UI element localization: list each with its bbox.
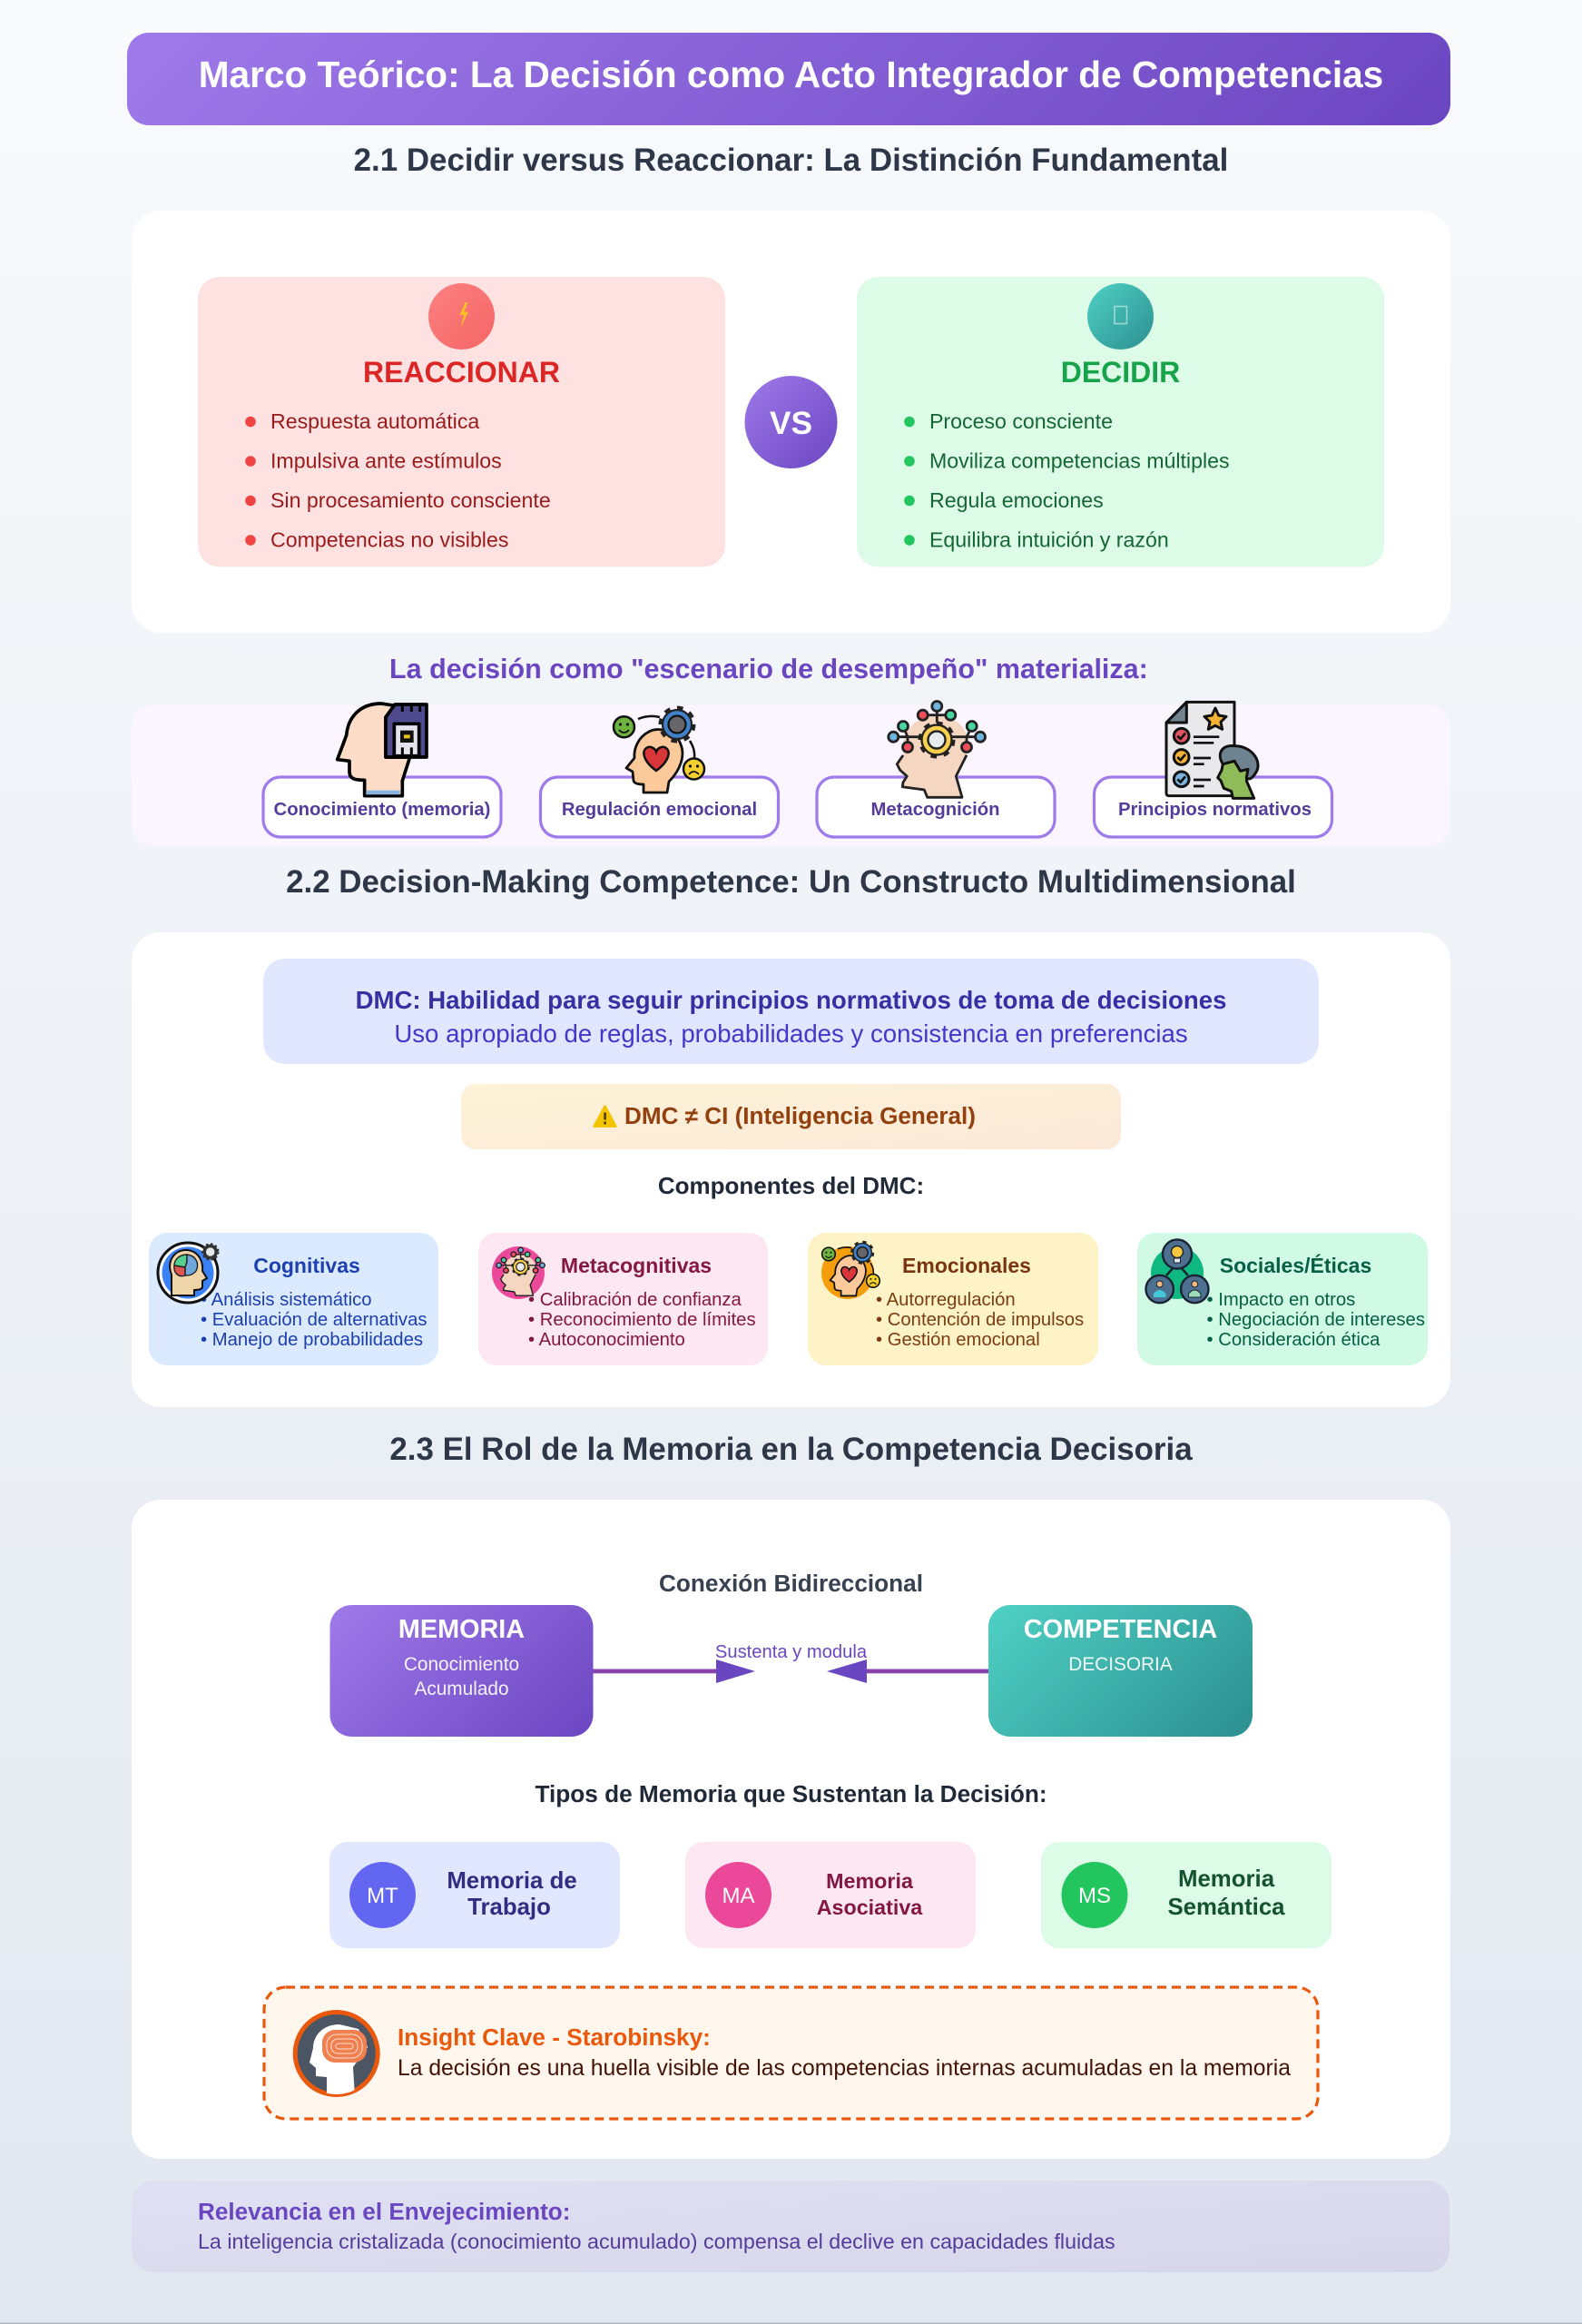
heading: tipos de memoria: Tipos de Memoria que Sustentan la Decisión: — [535, 1780, 1047, 1807]
icon: social network — [1145, 1240, 1209, 1303]
card: memoria de trabajo: Trabajo — [467, 1895, 551, 1920]
list: reaccionar traits: Competencias no visibles — [270, 528, 508, 552]
title banner — [127, 33, 1450, 125]
panel: decidir — [857, 277, 1384, 566]
callout: DMC not CI: DMC ≠ CI (Inteligencia General) — [624, 1102, 976, 1129]
box: memoria: Acumulado — [414, 1679, 509, 1699]
list: reaccionar traits — [245, 409, 551, 552]
box: competencia — [988, 1605, 1253, 1737]
card: sociales y éticas: Sociales/Éticas — [1220, 1253, 1371, 1277]
card: cognitivas — [149, 1233, 438, 1365]
icon: emotional regulation head — [614, 708, 704, 793]
panel: relevancia en el envejecimiento: Relevancia en el Envejecimiento: — [198, 2198, 570, 2225]
card: emocionales — [808, 1233, 1098, 1365]
card: cognitivas: • Análisis sistemático — [201, 1290, 372, 1310]
card: memoria asociativa: Memoria — [826, 1869, 914, 1893]
card: memoria semántica — [1041, 1842, 1331, 1948]
heading: section 2.1: 2.1 Decidir versus Reaccionar: La Distinción Fundamental — [354, 143, 1228, 178]
box: memoria — [330, 1605, 594, 1737]
box: competencia: COMPETENCIA — [1024, 1615, 1217, 1644]
card: sociales y éticas — [1137, 1233, 1428, 1365]
list: decidir traits: Regula emociones — [929, 488, 1104, 512]
badge: VS — [744, 376, 837, 468]
icon: emotional head — [821, 1242, 879, 1299]
heading: componentes: Componentes del DMC: — [658, 1172, 924, 1199]
card: metacognición: Metacognición — [871, 800, 999, 820]
card: cognitivas: • Evaluación de alternativas — [201, 1310, 427, 1330]
card: sociales y éticas: • Consideración ética — [1207, 1330, 1381, 1350]
box: memoria: MEMORIA — [398, 1615, 525, 1644]
list: reaccionar traits: Impulsiva ante estímulos — [270, 448, 502, 472]
panel: decidir versus reaccionar — [132, 211, 1450, 633]
card: conocimiento: Conocimiento (memoria) — [274, 800, 490, 820]
panel: DMC — [132, 932, 1450, 1407]
card: sociales y éticas: • Negociación de intereses — [1207, 1310, 1425, 1330]
panel: relevancia en el envejecimiento: La inteligencia cristalizada (conocimiento acumulado) compensa el declive en capacidades fluidas — [198, 2230, 1115, 2253]
list: decidir traits: Proceso consciente — [929, 409, 1113, 433]
card: principios — [1095, 777, 1332, 837]
card: cognitivas: Cognitivas — [253, 1254, 360, 1277]
card: principios: Principios normativos — [1118, 800, 1312, 820]
heading: decidir: DECIDIR — [1061, 356, 1180, 389]
card: memoria asociativa — [685, 1842, 976, 1948]
card: sociales y éticas: • Impacto en otros — [1207, 1290, 1355, 1310]
card: metacognitivas — [478, 1233, 768, 1365]
card: regulación: Regulación emocional — [562, 800, 757, 820]
card: memoria semántica: MS — [1078, 1884, 1111, 1908]
badge: VS: VS — [770, 406, 812, 441]
list: decidir traits — [904, 409, 1230, 552]
icon: metacognition head — [889, 701, 986, 797]
card: memoria de trabajo: Memoria de — [447, 1868, 577, 1894]
card: metacognitivas: • Calibración de confianza — [528, 1290, 742, 1310]
list: reaccionar traits: Respuesta automática — [270, 409, 479, 433]
card: regulación — [541, 777, 779, 837]
panel: memoria — [132, 1500, 1450, 2159]
callout: DMC definition: DMC: Habilidad para seguir principios normativos de toma de decisiones — [356, 986, 1226, 1014]
callout: insight clave — [264, 1987, 1318, 2119]
card: memoria asociativa: MA — [722, 1884, 755, 1908]
heading: escenario de desempeño: La decisión como "escenario de desempeño" materializa: — [389, 654, 1148, 684]
arrow: competencia to memoria — [827, 1659, 988, 1683]
card: memoria semántica: Memoria — [1178, 1866, 1275, 1892]
card: emocionales: Emocionales — [902, 1254, 1031, 1277]
card: metacognición — [817, 777, 1055, 837]
icon: cognitive head — [158, 1243, 218, 1303]
list: reaccionar traits: Sin procesamiento consciente — [270, 488, 551, 512]
callout: DMC definition: Uso apropiado de reglas, probabilidades y consistencia en preferencias — [394, 1019, 1188, 1048]
card: metacognitivas: • Reconocimiento de límites — [528, 1310, 756, 1330]
card: emocionales: • Gestión emocional — [876, 1330, 1040, 1350]
title banner: Marco Teórico: La Decisión como Acto Integrador de Competencias — [199, 54, 1383, 95]
heading: reaccionar: REACCIONAR — [363, 356, 560, 389]
card: emocionales: • Autorregulación — [876, 1290, 1016, 1310]
callout: insight clave: La decisión es una huella visible de las competencias internas acumuladas en la memoria — [398, 2056, 1291, 2081]
panel: escenario band — [132, 701, 1450, 846]
card: memoria de trabajo: MT — [367, 1884, 398, 1908]
card: metacognitivas: • Autoconocimiento — [528, 1330, 685, 1350]
icon: normative checklist — [1166, 702, 1258, 798]
card: memoria semántica: Semántica — [1167, 1895, 1285, 1920]
card: memoria asociativa: Asociativa — [817, 1896, 923, 1919]
icon: missing glyph in teal circle — [1087, 283, 1154, 350]
panel: relevancia en el envejecimiento — [132, 2181, 1449, 2272]
callout: insight clave: Insight Clave - Starobinsky: — [398, 2024, 711, 2051]
callout: DMC not CI — [461, 1084, 1121, 1149]
heading: section 2.2: 2.2 Decision-Making Competence: Un Constructo Multidimensional — [286, 864, 1296, 900]
icon: warning — [594, 1107, 615, 1126]
panel: reaccionar — [198, 277, 725, 566]
arrow: memoria to competencia — [593, 1659, 755, 1683]
list: decidir traits: Moviliza competencias múltiples — [929, 448, 1230, 472]
heading: conexión bidireccional: Conexión Bidireccional — [659, 1570, 923, 1597]
list: decidir traits: Equilibra intuición y razón — [929, 528, 1169, 552]
card: conocimiento — [263, 777, 501, 837]
icon: lightning — [428, 283, 495, 350]
label: sustenta y modula: Sustenta y modula — [715, 1642, 868, 1662]
card: metacognitivas: Metacognitivas — [561, 1254, 712, 1277]
box: competencia: DECISORIA — [1068, 1654, 1173, 1675]
box: memoria: Conocimiento — [404, 1654, 519, 1675]
icon: head with brain circuit — [295, 2012, 378, 2097]
callout: DMC definition — [263, 959, 1319, 1064]
icon: head with memory card — [338, 704, 427, 796]
card: emocionales: • Contención de impulsos — [876, 1310, 1084, 1330]
card: memoria de trabajo — [329, 1842, 620, 1948]
card: cognitivas: • Manejo de probabilidades — [201, 1330, 423, 1350]
icon: metacognitive head — [492, 1246, 545, 1299]
heading: section 2.3: 2.3 El Rol de la Memoria en la Competencia Decisoria — [389, 1432, 1193, 1467]
